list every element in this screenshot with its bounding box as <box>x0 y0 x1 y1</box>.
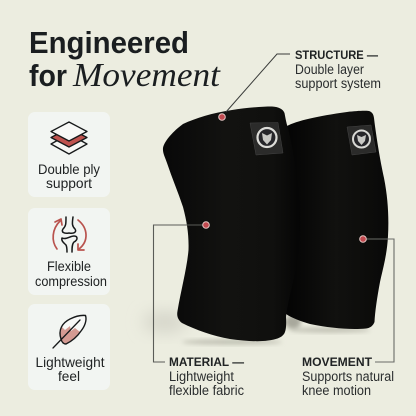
knee sleeve: right <box>284 111 388 329</box>
logo patch: left <box>250 122 283 155</box>
icon: feather <box>53 315 86 348</box>
callout: structure: STRUCTURE — <box>295 48 378 62</box>
label: flexible compression <box>35 259 107 289</box>
callout: movement <box>302 355 394 398</box>
knee sleeve: left <box>163 106 300 341</box>
label: lightweight feel: Lightweight <box>36 355 105 370</box>
title: for <box>29 58 67 93</box>
title: Movement <box>72 57 222 94</box>
leader line: material <box>154 225 203 362</box>
label: double ply support: Double ply <box>38 162 100 177</box>
panel: double ply support <box>28 112 110 197</box>
panel: flexible compression <box>28 208 110 295</box>
icon: knee joint with arrows <box>53 217 86 252</box>
marker: material <box>203 222 209 228</box>
panel: lightweight feel <box>28 304 110 390</box>
callout: movement: knee motion <box>302 383 371 398</box>
label: flexible compression: compression <box>35 274 107 289</box>
callout: material: flexible fabric <box>169 383 244 398</box>
callout: structure: support system <box>295 76 381 91</box>
callout: movement: MOVEMENT <box>302 355 373 369</box>
callout: material: MATERIAL — <box>169 355 244 369</box>
marker: movement <box>360 236 366 242</box>
leader line: movement <box>366 239 394 362</box>
callout: material: Lightweight <box>169 369 234 384</box>
title <box>29 25 222 94</box>
label: double ply support: support <box>46 176 92 191</box>
label: flexible compression: Flexible <box>47 259 91 274</box>
label: lightweight feel <box>36 355 105 384</box>
logo patch: right <box>347 125 376 155</box>
label: lightweight feel: feel <box>58 369 80 384</box>
callout: movement: Supports natural <box>302 369 394 384</box>
marker: structure <box>219 114 225 120</box>
callout: structure <box>295 48 381 91</box>
title: Engineered <box>29 25 189 60</box>
leader line: structure <box>226 54 290 112</box>
icon: stacked layers <box>51 122 87 154</box>
floor shadows <box>143 311 370 344</box>
callout: structure: Double layer <box>295 62 364 77</box>
label: double ply support <box>38 162 100 191</box>
callout: material <box>169 355 244 398</box>
